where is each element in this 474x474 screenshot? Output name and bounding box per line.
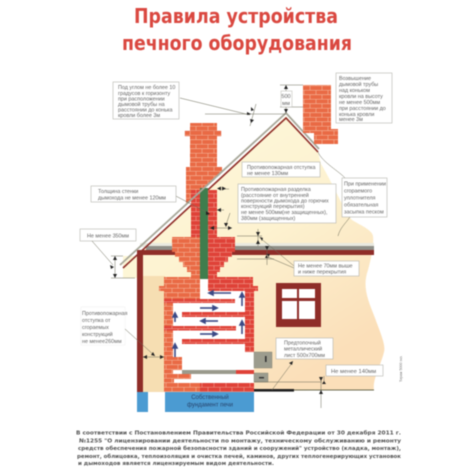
callout: flue wall thickness: Толщина стенки [98,189,138,195]
callout: sand backfill [342,178,387,217]
print run note: Тираж 5000 экз. [399,355,403,382]
callout: metal sheet [276,338,333,359]
callout: chimney height: не менее 500мм [339,100,380,106]
left wall [137,255,143,392]
ridge chimney [303,85,338,144]
callout: metal sheet: Предтопочный [284,340,321,346]
callout: 140 mm [326,365,383,376]
callout: chimney height: над коньком [339,88,370,94]
callout: clearance 260 mm: Противопожарная [82,311,127,317]
roof underlayer [123,118,318,268]
leader lines and dimension arrows at chimney [172,186,232,230]
stove doors [254,352,272,382]
dimension: 500 mm: 500 [281,94,291,100]
callout: 70 mm: Не менее 70мм выше [298,264,353,270]
callout: chimney height: кровли на высоту [339,94,383,100]
footer legal text: №1255 "О лицензировании деятельности по монтажу, техническому обслуживанию и ремонту [79,438,401,444]
callout: 140 mm: Не менее 140мм [331,369,376,375]
callout: fire break: поверхности дымохода до горючих [241,198,329,204]
house body [123,116,384,392]
window [276,283,321,327]
footer legal text [76,430,401,467]
callout: angle: кровли более 3м [118,113,160,119]
callout: metal sheet: лист 500х700мм [284,353,325,359]
title: печного оборудования [122,31,352,55]
dimension: ceiling clearance [237,229,294,268]
ceiling layers [137,243,374,255]
callout: sand backfill: обязательная [344,202,378,208]
callout: 350 mm: Не менее 350мм [87,234,129,240]
callout: clearance 130 mm [242,162,320,177]
callout: sand backfill: засыпка песком [344,210,384,216]
firebox base [164,357,182,370]
callout: clearance 260 mm: отступка от [82,318,111,324]
dimension: 260 mm [125,329,164,359]
callout: angle: при расположении [118,96,165,102]
footer legal text: В соответствии с Постановлением Правительства Российской Федерации от 30 декабря 2011 г. [76,430,401,436]
callout: clearance 260 mm: сгораемых [82,325,109,331]
callout: angle: расстоянии до конька [118,108,173,114]
title [122,4,352,55]
callout: sand backfill: сгораемого [344,188,372,194]
callout: clearance 130 mm: не менее 130мм [247,171,288,177]
stove [159,277,258,392]
title: Правила устройства [134,4,338,28]
main chimney [185,123,222,280]
callout: sand backfill: уплотнителя [344,196,376,202]
house illustration [120,85,384,412]
leader: sand backfill [318,152,350,236]
callout: angle: дымовой трубы на [118,101,165,108]
angle marker [180,98,286,126]
callout: angle: градусов к горизонту [118,91,170,97]
stove interior [173,279,254,383]
dimension: 500 mm: мм [282,101,290,107]
footer legal text: средств обеспечения пожарной безопасности зданий и сооружений" устройство (кладка, монтаж), [78,445,401,452]
callout: fire break: Противопожарная разделка [241,187,311,193]
foundation: Собственный [191,394,229,401]
callout: angle [113,82,179,119]
dimension: 350 mm [92,241,135,278]
grate [182,370,236,374]
callout: flue wall thickness [91,186,176,202]
dimension: 140 mm [254,376,326,408]
inner wall insulation [143,276,165,392]
foundation: фундамент печи [187,402,233,408]
flue [200,188,208,280]
callout: 350 mm [80,229,136,241]
flow arrows [173,291,244,357]
baffles [164,299,235,303]
callout: chimney height: при расстоянии до [339,106,386,112]
callout: fire break: 380мм (защищенных) [241,216,296,222]
dimension: 500 mm [280,85,303,113]
callout: chimney height: Возвышение [339,76,371,82]
callout: chimney height: конька кровли [339,112,374,118]
callout: clearance 260 mm [81,307,127,345]
callout: angle: Под углом не более 10 [118,85,175,91]
callout: clearance 130 mm: Противопожарная отступка [247,165,316,171]
footer legal text: и дымоходов является лицензируемым видом деятельности. [78,461,274,467]
callout: chimney height: дымовой трубы [339,81,378,88]
roof covering [120,113,319,265]
chimney corbel [172,237,235,279]
callout: flue wall thickness: дымохода не менее 120мм [98,196,166,202]
callout: fire break: конструкций перекрытия) [241,203,305,210]
callout: chimney height [336,73,392,123]
callout: fire break: (расстояние от внутренней [241,192,309,199]
callout: 70 mm: и ниже перекрытия [298,270,346,276]
floor line [254,389,374,391]
callout: sand backfill: При применении [344,182,386,188]
callout: clearance 260 mm: конструкций [82,331,113,338]
leader: metal sheet [272,361,293,390]
pre-furnace metal sheet [254,389,294,392]
eave strip [123,256,140,278]
callout: metal sheet: металлический [284,346,322,352]
callout: 70 mm [294,261,359,276]
callout: clearance 260 mm: не менее260мм [82,339,122,345]
callout: fire break: не менее 500мм(не защищенных), [241,210,328,216]
callout: fire break [238,184,336,223]
callout: chimney height: менее 3м [339,117,363,123]
foundation [137,392,254,412]
footer legal text: ремонт, облицовка, теплоизоляция и очистка печей, каминов, других теплогенерирующих установок [77,453,401,460]
